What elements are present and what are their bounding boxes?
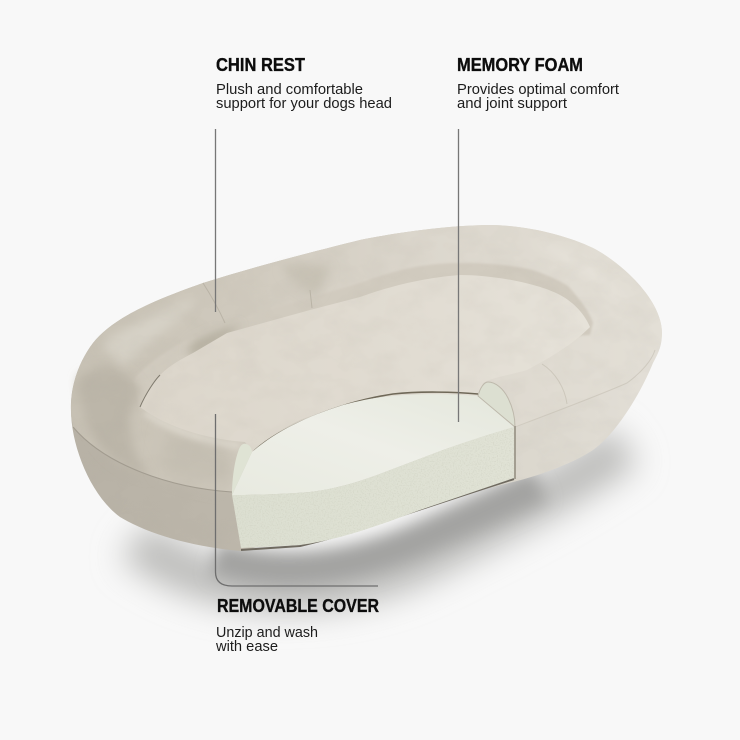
memory foam description: and joint support: [457, 96, 567, 112]
bed silhouette and outer side wall: [71, 225, 662, 551]
chin rest description: support for your dogs head: [216, 96, 392, 112]
bolster seam: [310, 290, 312, 308]
foam speckle: [228, 425, 518, 550]
piping seam right: [515, 350, 655, 427]
removable cover heading: REMOVABLE COVER: [217, 596, 379, 616]
bolster inner wall: [133, 263, 593, 410]
mattress edge line: [140, 375, 160, 407]
callout: memory foam: [457, 55, 619, 422]
foam base shadow line: [241, 479, 514, 550]
dog bed: [60, 220, 670, 560]
chin rest heading: CHIN REST: [216, 55, 305, 75]
removable cover description: with ease: [215, 639, 278, 655]
bolster seam right: [542, 364, 567, 404]
callout: chin rest: [216, 55, 392, 312]
piping seam left: [73, 427, 232, 492]
removable cover description: Unzip and wash: [216, 625, 318, 641]
chin rest description: Plush and comfortable: [216, 82, 363, 98]
cover right cut edge: [514, 426, 516, 479]
foam left arch: [232, 444, 252, 495]
cut cover edge: [254, 392, 478, 451]
foam top face: [232, 394, 514, 495]
removable cover leader line: [216, 414, 378, 586]
memory foam description: Provides optimal comfort: [457, 82, 619, 98]
foam front face: [232, 427, 514, 548]
bolster seam: [203, 283, 225, 323]
memory foam heading: MEMORY FOAM: [457, 55, 583, 75]
bed drop shadow: [135, 445, 625, 589]
bolster shading patches: [78, 240, 630, 488]
chin rest leader line: [214, 129, 216, 312]
bolster top: [71, 225, 662, 492]
foam block: [228, 382, 518, 550]
callout: removable cover: [215, 414, 379, 655]
fabric mottling: [60, 220, 670, 560]
mattress surface: [140, 275, 590, 452]
memory foam leader line: [458, 129, 460, 422]
foam right arch: [478, 382, 515, 427]
